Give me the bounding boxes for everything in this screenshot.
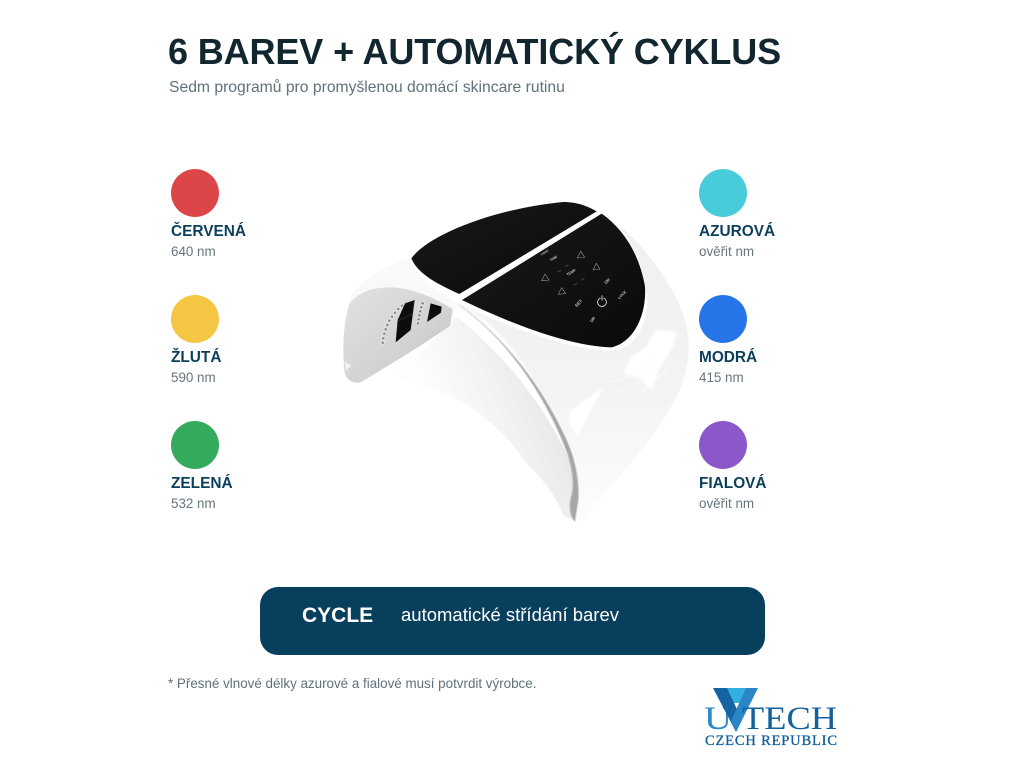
display labels: UP [589, 316, 597, 323]
shell grey edge [456, 303, 579, 522]
title: 6 BAREV + AUTOMATICKÝ CYKLUS [168, 31, 781, 72]
cycle label: CYCLE [302, 604, 373, 627]
colour item: red: ČERVENÁ [171, 223, 246, 240]
device illustration [343, 202, 688, 522]
logo V mark [713, 688, 758, 732]
colour item: green: 532 nm [171, 496, 216, 511]
inner grey panel [343, 287, 453, 383]
colour item: violet: ověřit nm [699, 496, 754, 511]
logo wordmark: TECH [742, 701, 837, 737]
colour item: red: 640 nm [171, 244, 216, 259]
colour item: blue: 415 nm [699, 370, 744, 385]
logo tagline: CZECH REPUBLIC [705, 733, 837, 749]
subtitle: Sedm programů pro promyšlenou domácí skincare rutinu [169, 79, 565, 96]
colour item: cyan: AZUROVÁ [699, 223, 775, 240]
colour item: violet: FIALOVÁ [699, 475, 767, 492]
main shell [410, 208, 689, 523]
display: right black panel [462, 214, 645, 347]
underside of arch [397, 317, 575, 520]
logo U: U [704, 701, 732, 737]
display controls [542, 251, 606, 306]
display labels: SET [574, 298, 584, 308]
colour item: green: ZELENÁ [171, 475, 233, 492]
display labels [540, 248, 628, 323]
colour item: red [171, 169, 246, 259]
white lip over side panel [343, 258, 457, 383]
colour item: yellow: ŽLUTÁ [171, 349, 221, 366]
display: left black panel [411, 202, 597, 294]
display labels: LIGHT [540, 248, 550, 257]
colour item: yellow: 590 nm [171, 370, 216, 385]
footnote: * Přesné vlnové délky azurové a fialové musí potvrdit výrobce. [168, 676, 536, 691]
display labels: TIME [549, 254, 559, 262]
cycle description: automatické střídání barev [401, 604, 619, 625]
LED strip [381, 302, 424, 344]
colour item: cyan [699, 169, 775, 259]
display labels: TEMP [566, 268, 577, 277]
display labels: OK [603, 276, 612, 285]
colour item: blue [699, 295, 757, 385]
colour item: cyan: ověřit nm [699, 244, 754, 259]
white reflections on shell [463, 306, 677, 477]
colour item: green [171, 421, 233, 511]
colour item: violet [699, 421, 767, 511]
white band around display [409, 200, 647, 351]
cycle banner [260, 587, 765, 655]
colour item: blue: MODRÁ [699, 349, 757, 366]
logo [704, 688, 837, 749]
vent windows [396, 300, 415, 342]
display labels: LOCK [617, 290, 628, 300]
colour item: yellow [171, 295, 221, 385]
gloss lines [610, 357, 667, 402]
